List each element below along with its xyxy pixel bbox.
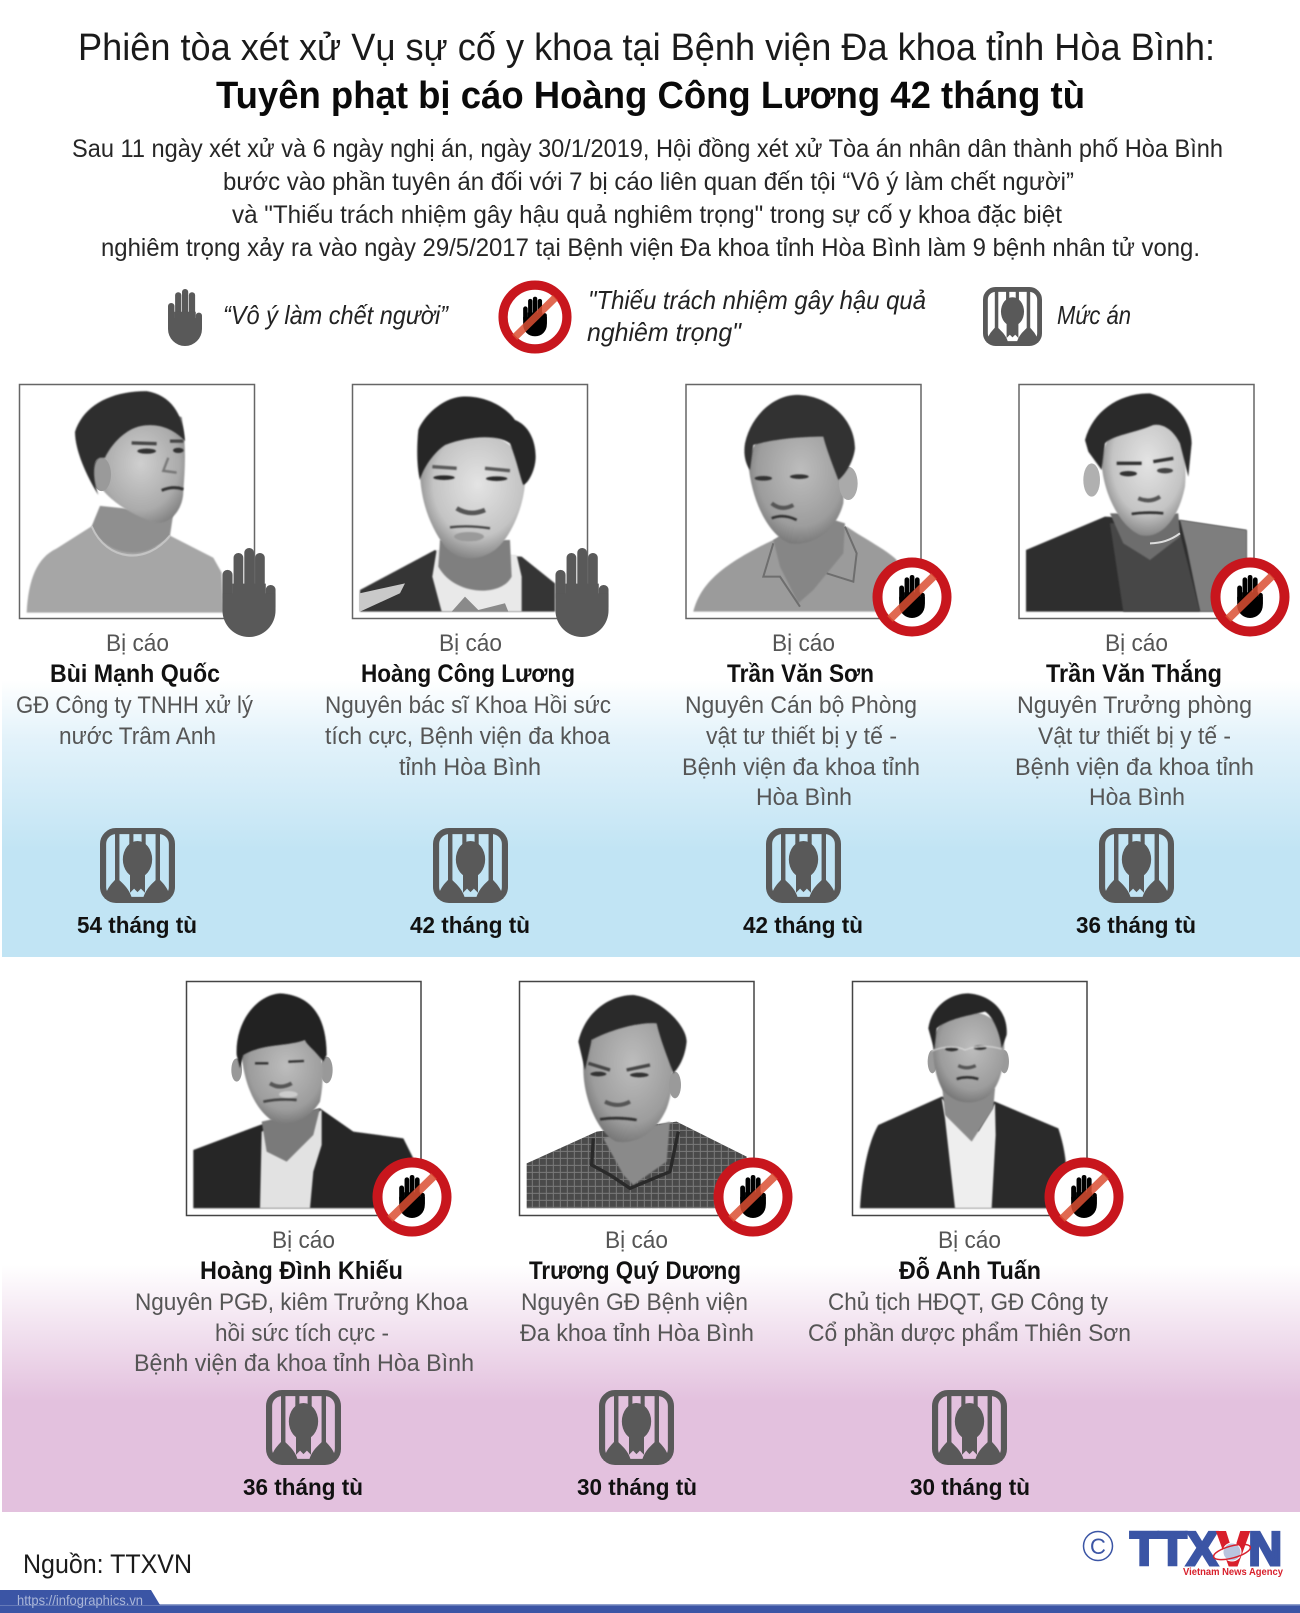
role: Nguyên bác sĩ Khoa Hồi sức bbox=[325, 692, 611, 719]
name: Đỗ Anh Tuấn bbox=[899, 1255, 1041, 1285]
photo frame bbox=[186, 982, 421, 1216]
label: defendant: Bị cáo bbox=[772, 630, 835, 657]
legend bbox=[168, 285, 1131, 349]
sentence: 36 tháng tù bbox=[243, 1474, 363, 1500]
card: Đỗ Anh Tuấn bbox=[808, 982, 1131, 1500]
icon: jail bbox=[103, 831, 172, 900]
sentence: 30 tháng tù bbox=[910, 1474, 1030, 1500]
role: Vật tư thiết bị y tế - bbox=[1038, 723, 1231, 750]
role: Chủ tịch HĐQT, GĐ Công ty bbox=[828, 1289, 1108, 1316]
logo: TTXVN: Vietnam News Agency bbox=[1183, 1566, 1283, 1578]
role: Nguyên PGĐ, kiêm Trưởng Khoa bbox=[135, 1289, 469, 1316]
intro text: bước vào phần tuyên án đối với 7 bị cáo liên quan đến tội “Vô ý làm chết người” bbox=[223, 168, 1074, 196]
icon: prohibited hand bbox=[378, 1162, 446, 1232]
role: tích cực, Bệnh viện đa khoa bbox=[325, 723, 611, 750]
icon: jail bbox=[602, 1393, 671, 1462]
label: defendant: Bị cáo bbox=[605, 1227, 668, 1254]
photo frame bbox=[352, 384, 588, 618]
role: Nguyên GĐ Bệnh viện bbox=[521, 1289, 748, 1316]
portrait bbox=[1026, 393, 1247, 612]
title: Tuyên phạt bị cáo Hoàng Công Lương 42 tháng tù bbox=[216, 75, 1085, 117]
sentence: 54 tháng tù bbox=[77, 912, 197, 938]
card: Trương Quý Dương bbox=[520, 982, 788, 1500]
legend label: irresponsibility: nghiêm trọng" bbox=[587, 317, 743, 347]
label: defendant: Bị cáo bbox=[106, 630, 169, 657]
icon: jail bbox=[436, 831, 505, 900]
icon: jail bbox=[269, 1393, 338, 1462]
name: Trương Quý Dương bbox=[529, 1257, 741, 1285]
source: Nguồn: TTXVN bbox=[23, 1549, 192, 1579]
legend label: irresponsibility: "Thiếu trách nhiệm gây hậu quả bbox=[588, 285, 926, 315]
intro text: và "Thiếu trách nhiệm gây hậu quả nghiêm trọng" trong sự cố y khoa đặc biệt bbox=[232, 201, 1062, 229]
legend label: sentence: Mức án bbox=[1057, 300, 1131, 330]
icon: hand legend bbox=[168, 289, 202, 346]
role: Bệnh viện đa khoa tỉnh bbox=[682, 754, 920, 781]
role bbox=[325, 692, 611, 781]
intro text: Sau 11 ngày xét xử và 6 ngày nghị án, ngày 30/1/2019, Hội đồng xét xử Tòa án nhân dân thành phố Hòa Bình bbox=[72, 135, 1223, 163]
footer bar bbox=[0, 1590, 1300, 1613]
card: Bùi Mạnh Quốc bbox=[16, 384, 276, 938]
label: defendant: Bị cáo bbox=[1105, 630, 1168, 657]
role bbox=[520, 1289, 754, 1347]
role: Nguyên Cán bộ Phòng bbox=[685, 692, 917, 719]
url: https://infographics.vn bbox=[17, 1592, 143, 1608]
role bbox=[808, 1289, 1131, 1347]
portrait bbox=[693, 395, 897, 612]
icon: prohibited hand bbox=[878, 562, 946, 632]
role: GĐ Công ty TNHH xử lý bbox=[16, 692, 253, 719]
icon: jail bbox=[769, 831, 838, 900]
legend label: negligent homicide: “Vô ý làm chết người” bbox=[223, 300, 449, 330]
portrait bbox=[360, 397, 555, 612]
photo frame bbox=[1019, 384, 1254, 618]
sentence: 42 tháng tù bbox=[410, 912, 530, 938]
icon: jail bbox=[935, 1393, 1004, 1462]
role: nước Trâm Anh bbox=[59, 723, 216, 750]
label: defendant: Bị cáo bbox=[938, 1227, 1001, 1254]
portrait bbox=[193, 993, 413, 1208]
photo frame bbox=[852, 982, 1087, 1216]
legend label: irresponsibility bbox=[587, 285, 926, 347]
role: Bệnh viện đa khoa tỉnh Hòa Bình bbox=[134, 1350, 474, 1377]
role: Đa khoa tỉnh Hòa Bình bbox=[520, 1320, 754, 1347]
icon: prohibited hand bbox=[1050, 1162, 1118, 1232]
portrait bbox=[860, 993, 1067, 1208]
title bbox=[78, 27, 1215, 117]
name: Hoàng Công Lương bbox=[361, 660, 575, 688]
panel: pink band bbox=[2, 1265, 1300, 1512]
role bbox=[134, 1289, 474, 1377]
icon: jail bbox=[1102, 831, 1171, 900]
intro text bbox=[72, 135, 1223, 262]
icon: prohibited hand legend bbox=[503, 285, 567, 349]
name: Trần Văn Thắng bbox=[1046, 658, 1222, 688]
intro text: nghiêm trọng xảy ra vào ngày 29/5/2017 tại Bệnh viện Đa khoa tỉnh Hòa Bình làm 9 bệnh nhân tử vong. bbox=[101, 234, 1200, 262]
photo frame bbox=[520, 982, 754, 1216]
label: defendant: Bị cáo bbox=[439, 630, 502, 657]
title: Phiên tòa xét xử Vụ sự cố y khoa tại Bệnh viện Đa khoa tỉnh Hòa Bình: bbox=[78, 27, 1215, 69]
role bbox=[1015, 692, 1254, 811]
logo: TTXVN: TTXVN bbox=[1130, 1522, 1282, 1575]
sentence: 36 tháng tù bbox=[1076, 912, 1196, 938]
panel: blue band bbox=[2, 680, 1300, 957]
icon: hand bbox=[555, 548, 609, 637]
role: Nguyên Trưởng phòng bbox=[1017, 692, 1252, 719]
role: Cổ phần dược phẩm Thiên Sơn bbox=[808, 1320, 1131, 1347]
role bbox=[16, 692, 253, 750]
logo: TTXVN: C bbox=[1090, 1534, 1106, 1559]
role: Bệnh viện đa khoa tỉnh bbox=[1015, 754, 1254, 781]
sentence: 42 tháng tù bbox=[743, 912, 863, 938]
photo frame bbox=[20, 384, 254, 618]
role bbox=[682, 692, 920, 811]
sentence: 30 tháng tù bbox=[577, 1474, 697, 1500]
icon: hand bbox=[222, 548, 276, 637]
portrait bbox=[27, 391, 223, 613]
card: Trần Văn Sơn bbox=[682, 384, 946, 938]
card: Hoàng Công Lương bbox=[325, 384, 611, 938]
card: Hoàng Đình Khiếu bbox=[134, 982, 474, 1500]
role: hồi sức tích cực - bbox=[215, 1320, 389, 1347]
portrait bbox=[527, 995, 747, 1208]
role: Hòa Bình bbox=[756, 784, 852, 811]
icon: prohibited hand bbox=[718, 1162, 788, 1232]
label: defendant: Bị cáo bbox=[272, 1227, 335, 1254]
card: Trần Văn Thắng bbox=[1015, 384, 1284, 938]
role: tỉnh Hòa Bình bbox=[399, 754, 541, 781]
photo frame bbox=[686, 384, 921, 618]
icon: jail legend bbox=[985, 289, 1040, 344]
role: vật tư thiết bị y tế - bbox=[706, 723, 897, 750]
name: Bùi Mạnh Quốc bbox=[50, 660, 220, 688]
role: Hòa Bình bbox=[1089, 784, 1185, 811]
name: Trần Văn Sơn bbox=[727, 660, 874, 688]
icon: prohibited hand bbox=[1216, 562, 1284, 632]
name: Hoàng Đình Khiếu bbox=[200, 1257, 403, 1285]
